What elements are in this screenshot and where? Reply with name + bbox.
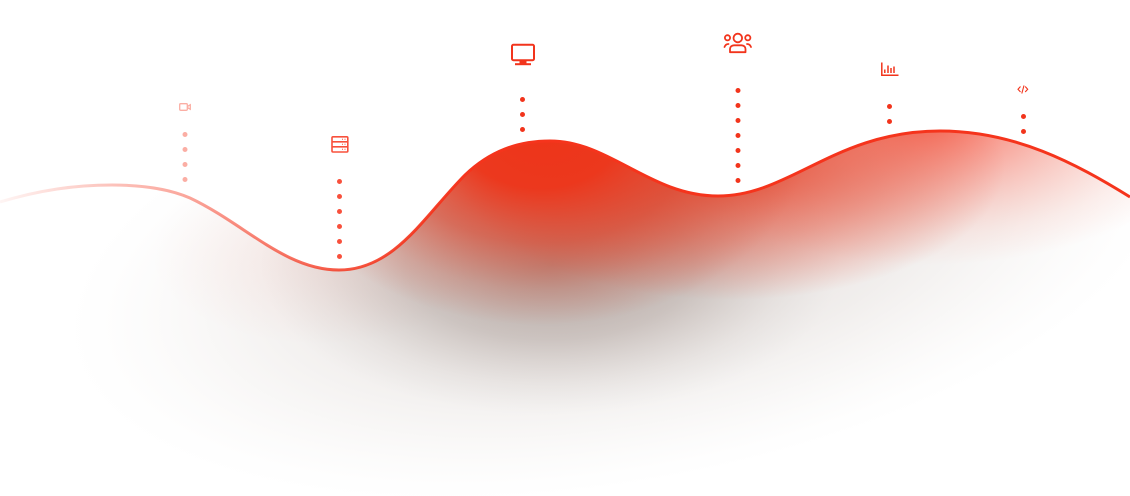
area under the wave (175, 132, 1130, 440)
dots: video marker (182, 132, 188, 182)
icon: video camera (180, 104, 190, 110)
dots: code marker (1021, 114, 1026, 134)
icon: bar chart (882, 62, 898, 75)
icon: monitor (512, 45, 534, 64)
icon: team (724, 34, 751, 52)
dots: server marker (337, 179, 342, 259)
dots: chart marker (887, 104, 892, 124)
icon: code (1018, 86, 1028, 94)
wave line (0, 131, 1130, 270)
dots: monitor marker (520, 97, 525, 132)
dots: team marker (736, 88, 740, 183)
icon: server (332, 137, 348, 152)
